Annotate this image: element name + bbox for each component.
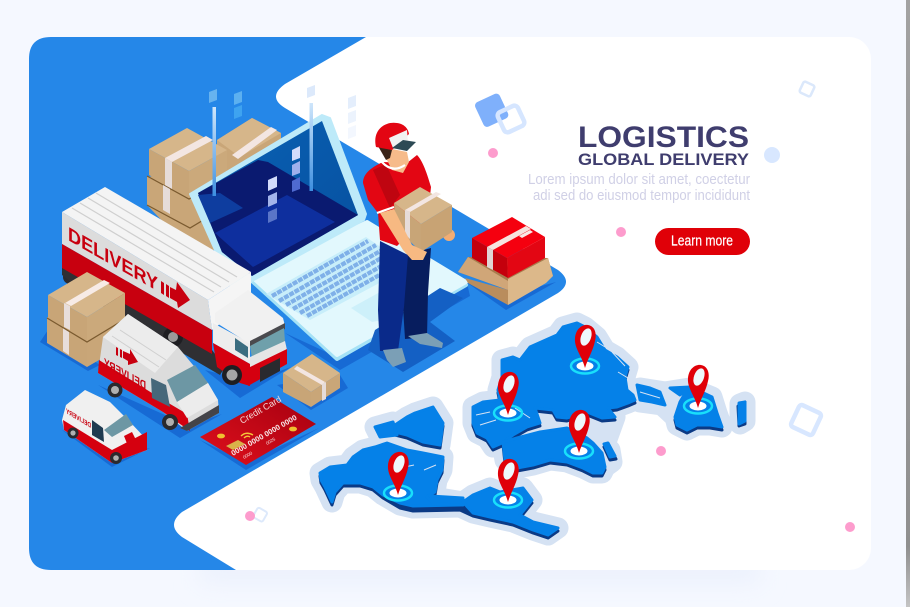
ground shadows <box>40 282 556 470</box>
boxes behind truck <box>147 118 281 250</box>
New Zealand <box>739 402 745 424</box>
body text: Lorem ipsum dolor sit amet, coectetur <box>528 172 750 188</box>
van hood <box>177 383 218 418</box>
map land <box>320 323 745 535</box>
cab nose <box>250 341 287 368</box>
trailer roof <box>62 187 251 300</box>
person with parcel <box>363 123 463 372</box>
map pin: Africa <box>565 410 593 458</box>
Eurasia <box>473 323 635 447</box>
truck cab <box>213 290 287 386</box>
cab red front <box>248 349 287 386</box>
front wheel <box>222 365 242 385</box>
decorative shapes <box>245 81 855 532</box>
trailer front <box>208 272 251 330</box>
small box foreground <box>283 354 340 407</box>
beam left <box>212 107 216 196</box>
credit card <box>200 394 316 465</box>
chassis <box>62 262 225 375</box>
middle wheel <box>163 327 183 347</box>
map extrusion <box>320 326 745 538</box>
carton front faces <box>458 257 553 305</box>
small van wheels <box>68 428 122 464</box>
laptop screen <box>190 115 366 297</box>
left leg <box>378 241 408 351</box>
delivery van <box>98 314 219 431</box>
small van side window <box>92 420 104 442</box>
trailer side <box>62 212 212 330</box>
trailer red band <box>62 244 212 354</box>
windshield <box>250 328 285 358</box>
van wheels <box>108 382 178 430</box>
cab door <box>213 323 250 364</box>
cab roof <box>215 290 285 344</box>
body text: adi sed do eiusmod tempor incididunt <box>533 188 750 204</box>
cab lower red <box>213 343 250 386</box>
carton back flap <box>458 257 553 290</box>
hollow square bottom <box>253 507 268 522</box>
map coast details <box>400 340 660 470</box>
delivery truck <box>62 187 287 386</box>
credit card: 0025 <box>265 436 277 446</box>
Arctic islands <box>375 422 397 437</box>
credit card: 0000 <box>242 450 254 460</box>
Australia <box>675 388 722 430</box>
laptop <box>190 115 466 359</box>
red parcel <box>472 217 545 278</box>
map halo <box>320 323 745 535</box>
small van arrow <box>124 432 136 446</box>
button: learn more: Learn more <box>671 232 733 250</box>
subtitle: GLOBAL DELIVERY <box>578 150 750 169</box>
map pin: South America <box>494 459 522 508</box>
large hollow square right <box>790 404 822 436</box>
Asian islands <box>637 385 665 405</box>
van windshield <box>167 365 208 402</box>
keyboard <box>266 237 385 320</box>
small van windshield <box>104 414 133 437</box>
laptop base <box>252 222 466 359</box>
small hollow square top right <box>799 81 815 97</box>
van lettering: DELIVERY <box>104 355 146 393</box>
world map <box>320 323 745 538</box>
blue diagonal panel <box>29 37 566 570</box>
card chip <box>226 440 245 450</box>
van side window <box>151 378 170 407</box>
title: LOGISTICS <box>578 121 749 154</box>
truck arrow <box>161 281 190 308</box>
van roof <box>103 314 178 373</box>
small van lettering: DELIVERY <box>66 407 91 430</box>
body text <box>528 172 750 204</box>
pale blue dot <box>764 147 780 163</box>
cap <box>375 123 416 151</box>
neck and face <box>385 149 409 173</box>
small delivery van <box>62 390 147 464</box>
card dots <box>217 427 297 438</box>
card contactless icon <box>241 433 253 438</box>
arm <box>380 209 427 260</box>
van red stripe <box>98 360 190 431</box>
sleeve cuff <box>377 207 394 213</box>
Madagascar <box>604 443 615 457</box>
floating squares <box>209 85 356 223</box>
van body <box>98 314 219 431</box>
held parcel <box>394 187 452 252</box>
icon: overlapping squares <box>474 92 526 134</box>
box stack <box>147 128 227 250</box>
card shadow <box>200 558 760 582</box>
map pin: North America <box>384 452 412 500</box>
credit card: 0000 0000 0000 0000 <box>230 413 298 458</box>
button: learn more <box>655 228 750 255</box>
person shadow <box>368 288 463 372</box>
shirt <box>363 155 431 246</box>
truck lettering: DELIVERY <box>68 223 158 296</box>
visor band <box>250 323 285 347</box>
Greenland <box>395 407 443 445</box>
collar <box>381 161 405 169</box>
van arrow <box>116 347 138 365</box>
red box in open carton <box>458 217 553 305</box>
cab door window <box>235 338 248 358</box>
grille <box>260 358 280 382</box>
roof ribs <box>72 193 237 292</box>
right leg <box>403 248 431 339</box>
rear wheel <box>63 270 77 284</box>
box: back right <box>217 118 281 190</box>
box stack left <box>47 272 125 367</box>
small van red stripe <box>63 420 147 463</box>
Central America link <box>430 496 463 505</box>
sleeve shading <box>373 164 400 208</box>
map pin: Europe <box>494 372 522 420</box>
North America <box>320 443 460 506</box>
data beams and floating squares <box>209 85 356 223</box>
van bumper <box>180 405 219 431</box>
map pin: Russia <box>571 325 599 374</box>
map pin: Australia <box>684 365 712 414</box>
far hand <box>443 229 455 241</box>
beam right <box>310 103 313 191</box>
scrollbar strip <box>906 0 910 607</box>
South America <box>463 488 558 535</box>
Africa <box>503 428 605 473</box>
touchpad <box>351 292 383 322</box>
pink dots <box>245 148 855 532</box>
hair <box>378 146 392 160</box>
shoes <box>383 333 443 367</box>
credit card: Credit Card <box>238 394 283 426</box>
